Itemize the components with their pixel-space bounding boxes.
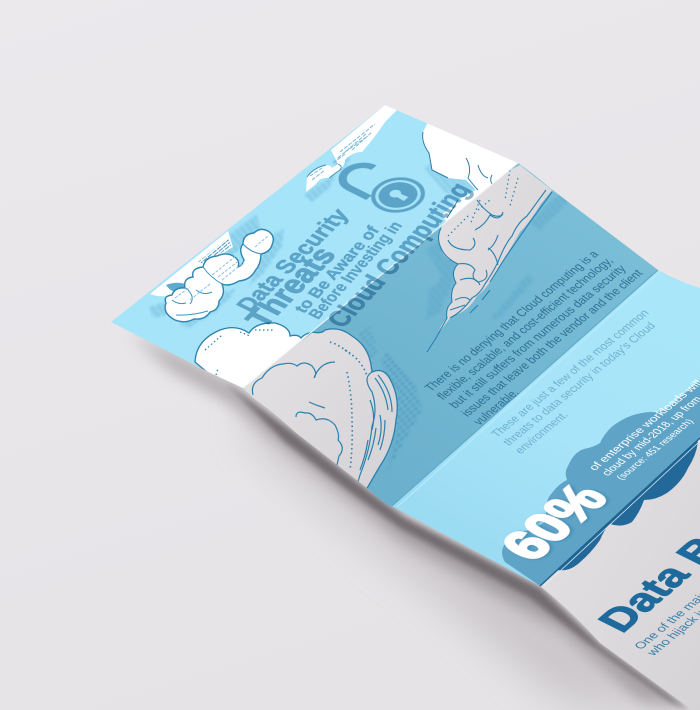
title line: Cloud Computing: Cloud Computing (321, 178, 477, 332)
title line: Before Investing in: Before Investing in (305, 219, 406, 322)
fold line on callout (540, 438, 700, 586)
secondary text: These are just a few of the most common (488, 307, 652, 440)
secondary text: environment. (512, 409, 571, 456)
intro text: but it still suffers from numerous data security (446, 262, 629, 411)
title (236, 183, 474, 326)
body text: data breaches (636, 594, 700, 656)
title line: Data Security: Data Security (231, 205, 355, 316)
illustration: left cloud (150, 229, 273, 322)
panel: data breaches (540, 421, 700, 710)
fold highlight lines (243, 163, 661, 507)
callout: dark cloud shadow (558, 442, 698, 570)
panel: cover (111, 105, 476, 388)
halftone hatching behind clouds (148, 150, 572, 470)
statistic: 60%: 60% (487, 475, 620, 568)
intro text: vulnerable. (471, 387, 522, 427)
brochure shadow (130, 332, 692, 710)
illustration: large lower cloud (195, 323, 397, 500)
panel: statistic (392, 270, 700, 586)
title line: to Be Aware of: to Be Aware of (291, 223, 383, 316)
intro text: issues that leave both the vendor and the client (458, 267, 646, 419)
brochure (100, 95, 700, 710)
callout: 60% cloud (502, 380, 700, 586)
intro text: flexible, scalable, and cost-efficient technology, (434, 255, 616, 402)
panel: introduction (243, 163, 658, 506)
title line: Threats: Threats (238, 242, 343, 332)
illustration: right cloud (423, 122, 552, 352)
icon: open padlock (338, 162, 426, 213)
illustration: top cloud strip (306, 105, 397, 192)
statistic caption: (source: 451 research) (615, 418, 696, 482)
icon: keyhole (389, 190, 408, 201)
secondary text: threats to data security in today’s Cloud (500, 320, 658, 448)
intro text: There is no denying that Cloud computing is a (422, 248, 601, 394)
